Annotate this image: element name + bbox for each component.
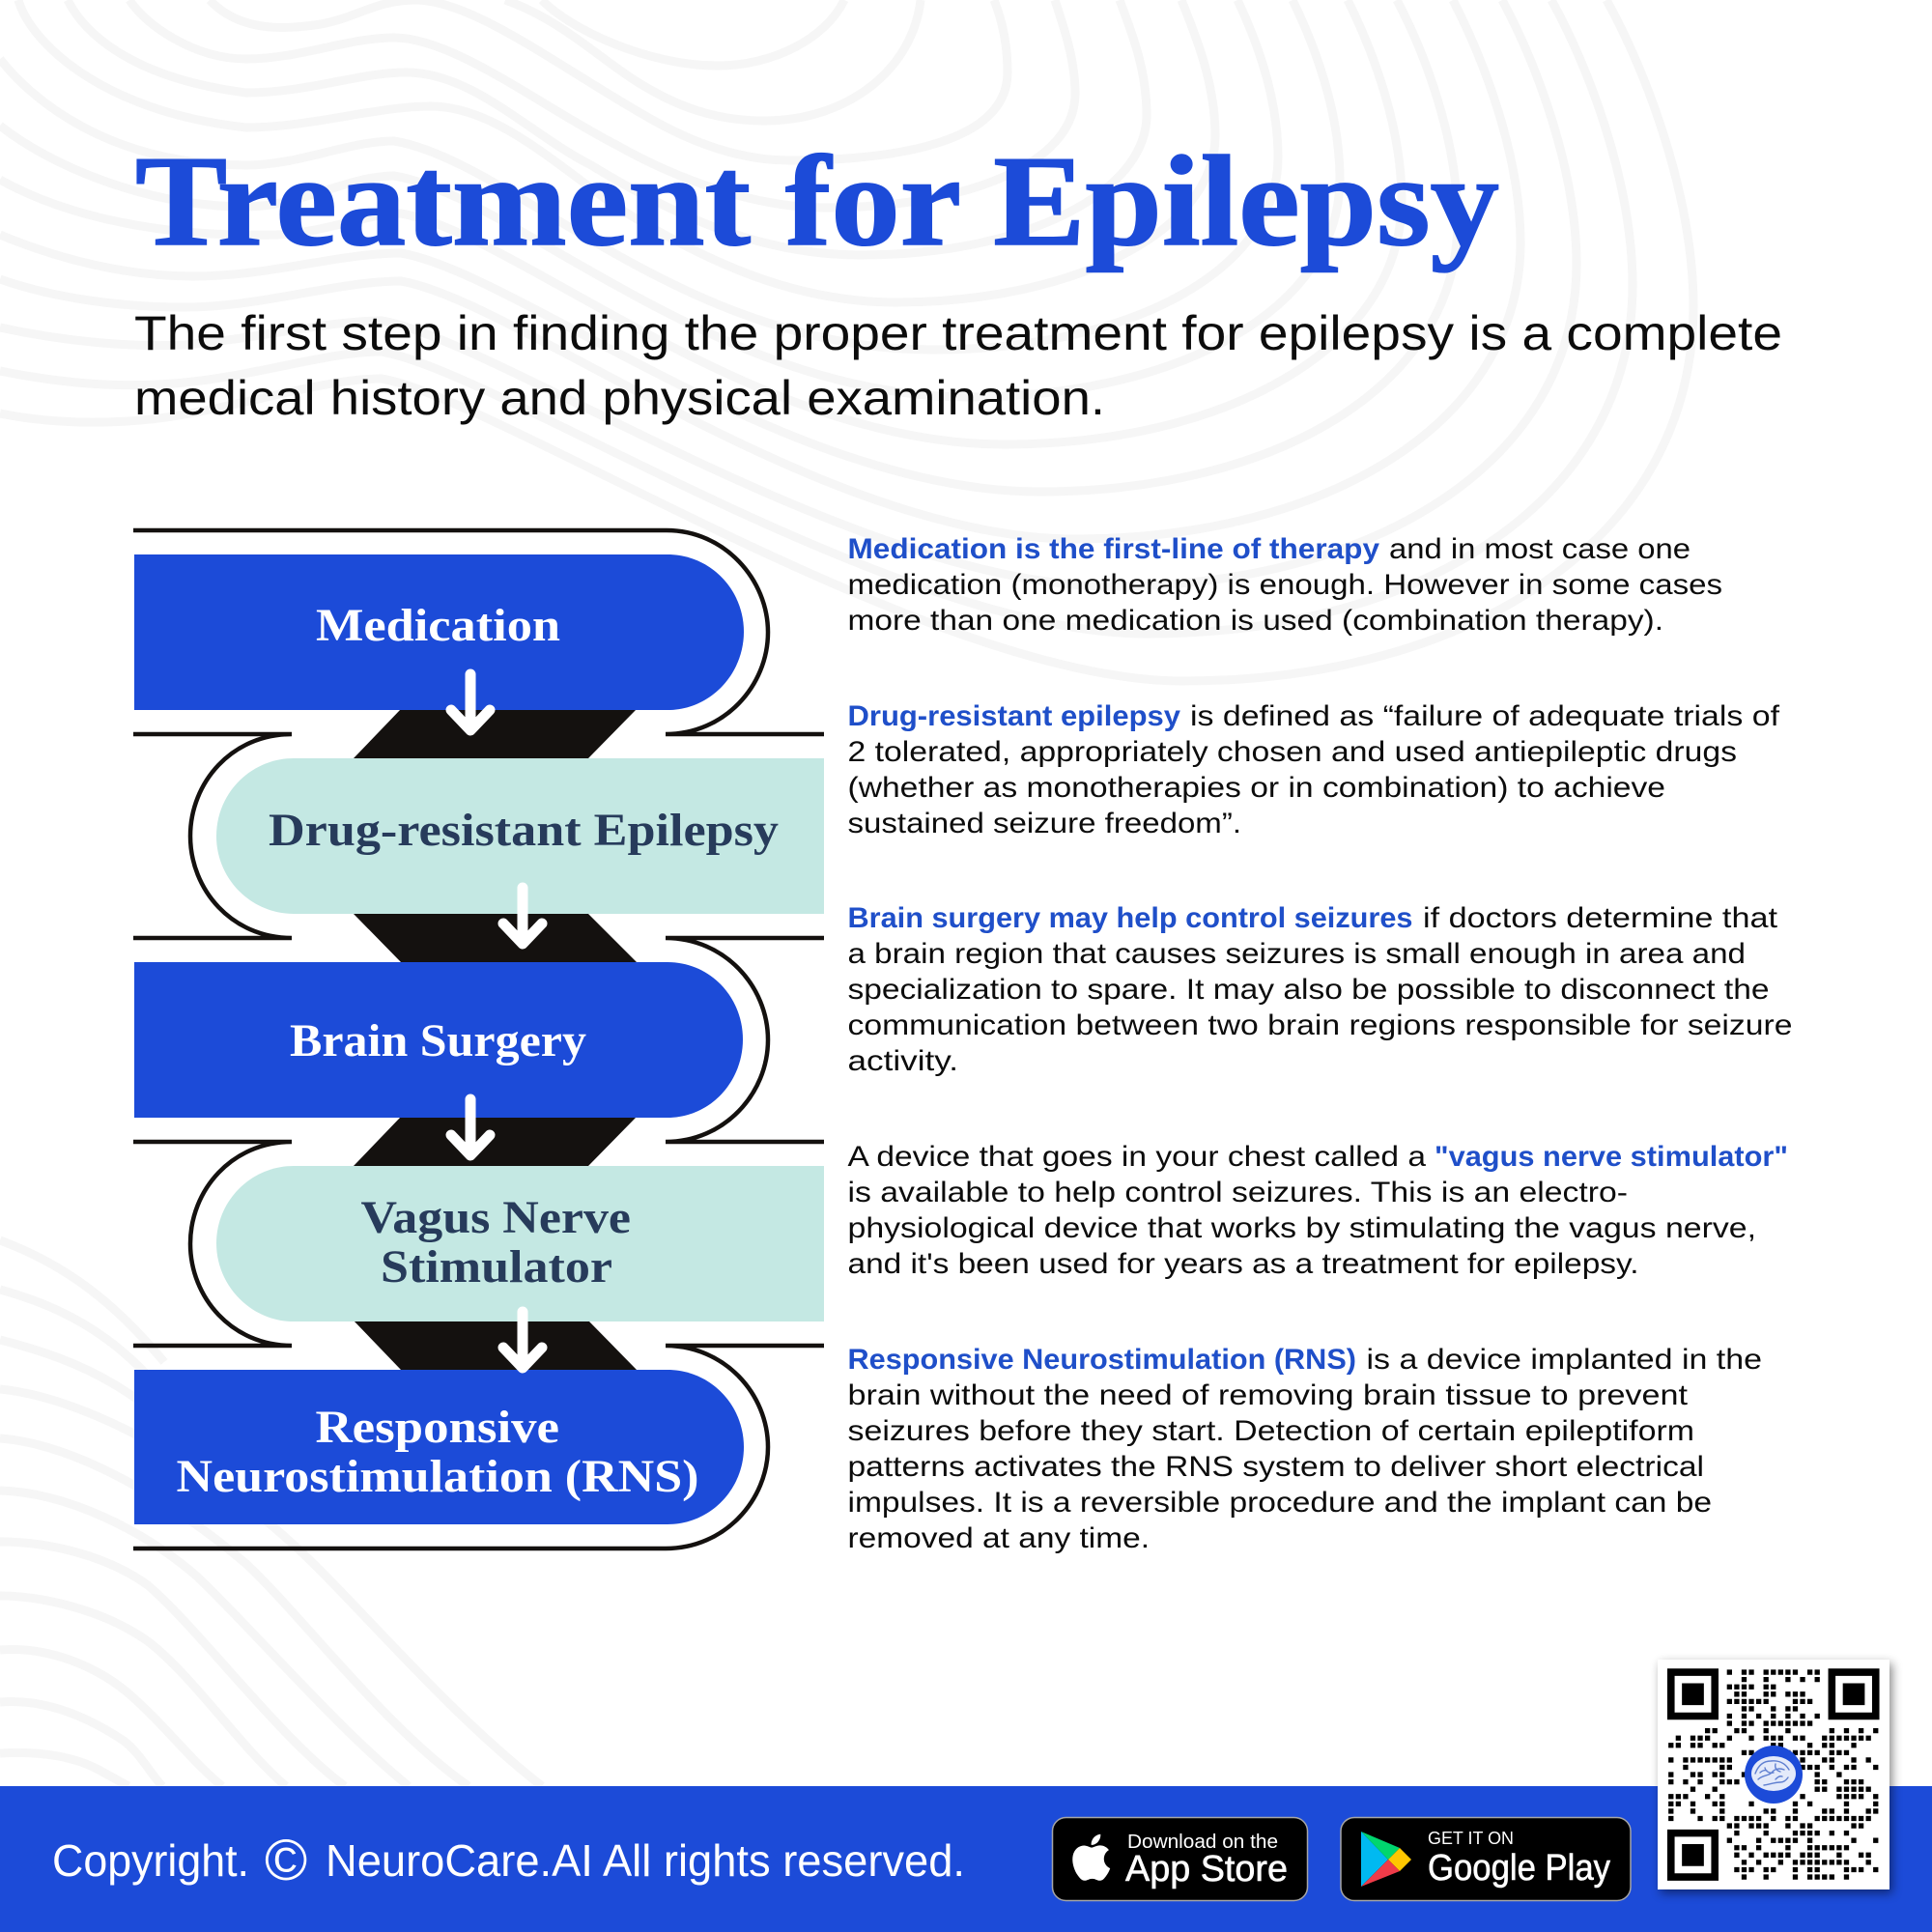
step: medication <box>134 554 744 710</box>
text block: brain surgery: activity. <box>848 1045 958 1077</box>
text block: medication: and in most case one <box>1389 533 1690 565</box>
step: vagus nerve stimulator: Vagus Nerve <box>361 1192 631 1243</box>
step: vagus nerve stimulator: Stimulator <box>381 1241 612 1293</box>
copyright text: Copyright. <box>52 1835 249 1886</box>
text block: medication: Medication is the first-line of therapy <box>848 533 1379 565</box>
text block: responsive neurostimulation: removed at any time. <box>848 1522 1150 1554</box>
step: brain surgery: Brain Surgery <box>290 1015 586 1066</box>
text block: drug-resistant epilepsy: sustained seizure freedom”. <box>848 808 1241 839</box>
step: medication: Medication <box>316 600 560 651</box>
text block: drug-resistant epilepsy: Drug-resistant epilepsy <box>848 700 1180 732</box>
connector: drug-resistant to brain surgery <box>354 914 637 962</box>
copyright text <box>52 1828 965 1892</box>
text block: brain surgery: specialization to spare. It may also be possible to disconnect the <box>848 974 1770 1006</box>
copyright text: NeuroCare.AI All rights reserved. <box>326 1835 965 1886</box>
connector: vagus nerve to RNS <box>354 1321 637 1370</box>
subtitle: medical history and physical examination. <box>134 371 1105 425</box>
subtitle: The first step in finding the proper treatment for epilepsy is a complete <box>134 306 1782 360</box>
step: drug-resistant epilepsy <box>216 758 824 914</box>
connector: brain surgery to vagus nerve <box>354 1117 637 1166</box>
arrow 3 <box>451 1099 490 1155</box>
text block: responsive neurostimulation: Responsive Neurostimulation (RNS) <box>848 1344 1356 1376</box>
icon: play triangle <box>1361 1832 1411 1887</box>
text block: vagus nerve stimulator: "vagus nerve stimulator" <box>1435 1141 1788 1173</box>
footer band <box>0 1786 1932 1932</box>
icon: apple <box>1072 1834 1110 1881</box>
text block: brain surgery: a brain region that causes seizures is small enough in area and <box>848 938 1746 970</box>
text block: responsive neurostimulation: brain without the need of removing brain tissue to prevent <box>848 1379 1689 1411</box>
text block: brain surgery: communication between two brain regions responsible for seizure <box>848 1009 1793 1041</box>
step: vagus nerve stimulator <box>216 1166 824 1321</box>
step: responsive neurostimulation: Responsive <box>315 1402 559 1453</box>
badge: Google Play <box>1341 1818 1631 1901</box>
icon: brain logo <box>1745 1746 1803 1804</box>
text block: medication <box>848 533 1722 637</box>
text block: responsive neurostimulation <box>848 1344 1762 1554</box>
text block: responsive neurostimulation: impulses. It is a reversible procedure and the implant can be <box>848 1487 1712 1519</box>
text block: vagus nerve stimulator <box>848 1141 1788 1280</box>
text block: responsive neurostimulation: patterns activates the RNS system to deliver short electrical <box>848 1451 1704 1483</box>
text block: vagus nerve stimulator: and it's been used for years as a treatment for epilepsy. <box>848 1248 1638 1280</box>
text block: brain surgery: if doctors determine that <box>1423 902 1778 934</box>
badge: App Store <box>1053 1818 1308 1901</box>
step: responsive neurostimulation <box>134 1370 744 1524</box>
badge: Google Play: Google Play <box>1428 1848 1610 1889</box>
outline: medication bracket <box>133 530 824 734</box>
QR modules <box>1667 1668 1880 1881</box>
step: drug-resistant epilepsy: Drug-resistant Epilepsy <box>269 805 779 856</box>
text block: drug-resistant epilepsy <box>848 700 1780 839</box>
connector: medication to drug-resistant <box>354 709 637 758</box>
badge: App Store: App Store <box>1125 1849 1288 1889</box>
text block: drug-resistant epilepsy: 2 tolerated, appropriately chosen and used antiepileptic drugs <box>848 736 1737 768</box>
step: responsive neurostimulation: Neurostimulation (RNS) <box>176 1451 699 1502</box>
text block: medication: medication (monotherapy) is enough. However in some cases <box>848 569 1722 601</box>
text block: vagus nerve stimulator: A device that goes in your chest called a <box>848 1141 1426 1173</box>
QR code card <box>1658 1660 1889 1889</box>
text block: responsive neurostimulation: is a device implanted in the <box>1366 1344 1762 1376</box>
text block: vagus nerve stimulator: is available to help control seizures. This is an electro- <box>848 1177 1628 1208</box>
text block: vagus nerve stimulator: physiological device that works by stimulating the vagus nerve, <box>848 1212 1756 1244</box>
arrow 2 <box>503 888 542 944</box>
step: brain surgery <box>134 962 743 1118</box>
outline: brain surgery bracket <box>666 938 824 1142</box>
outline: vagus nerve bracket <box>133 1142 292 1346</box>
title: Treatment for Epilepsy <box>135 129 1499 272</box>
arrow 1 <box>451 674 490 730</box>
flowchart: treatment pathway <box>133 530 824 1548</box>
text block: drug-resistant epilepsy: (whether as monotherapies or in combination) to achieve <box>848 772 1665 804</box>
subtitle <box>134 306 1782 425</box>
text block: responsive neurostimulation: seizures before they start. Detection of certain epileptiform <box>848 1415 1694 1447</box>
arrow 4 <box>503 1312 542 1368</box>
badge: Google Play: GET IT ON <box>1428 1829 1514 1848</box>
text block: medication: more than one medication is used (combination therapy). <box>848 605 1663 637</box>
outline: RNS bracket <box>133 1346 824 1548</box>
text block: drug-resistant epilepsy: is defined as “failure of adequate trials of <box>1190 700 1780 732</box>
text block: brain surgery <box>848 902 1793 1077</box>
outline: drug-resistant bracket <box>133 734 292 938</box>
copyright text: © <box>265 1828 307 1892</box>
badge: App Store: Download on the <box>1127 1832 1278 1853</box>
text block: brain surgery: Brain surgery may help control seizures <box>848 902 1412 934</box>
